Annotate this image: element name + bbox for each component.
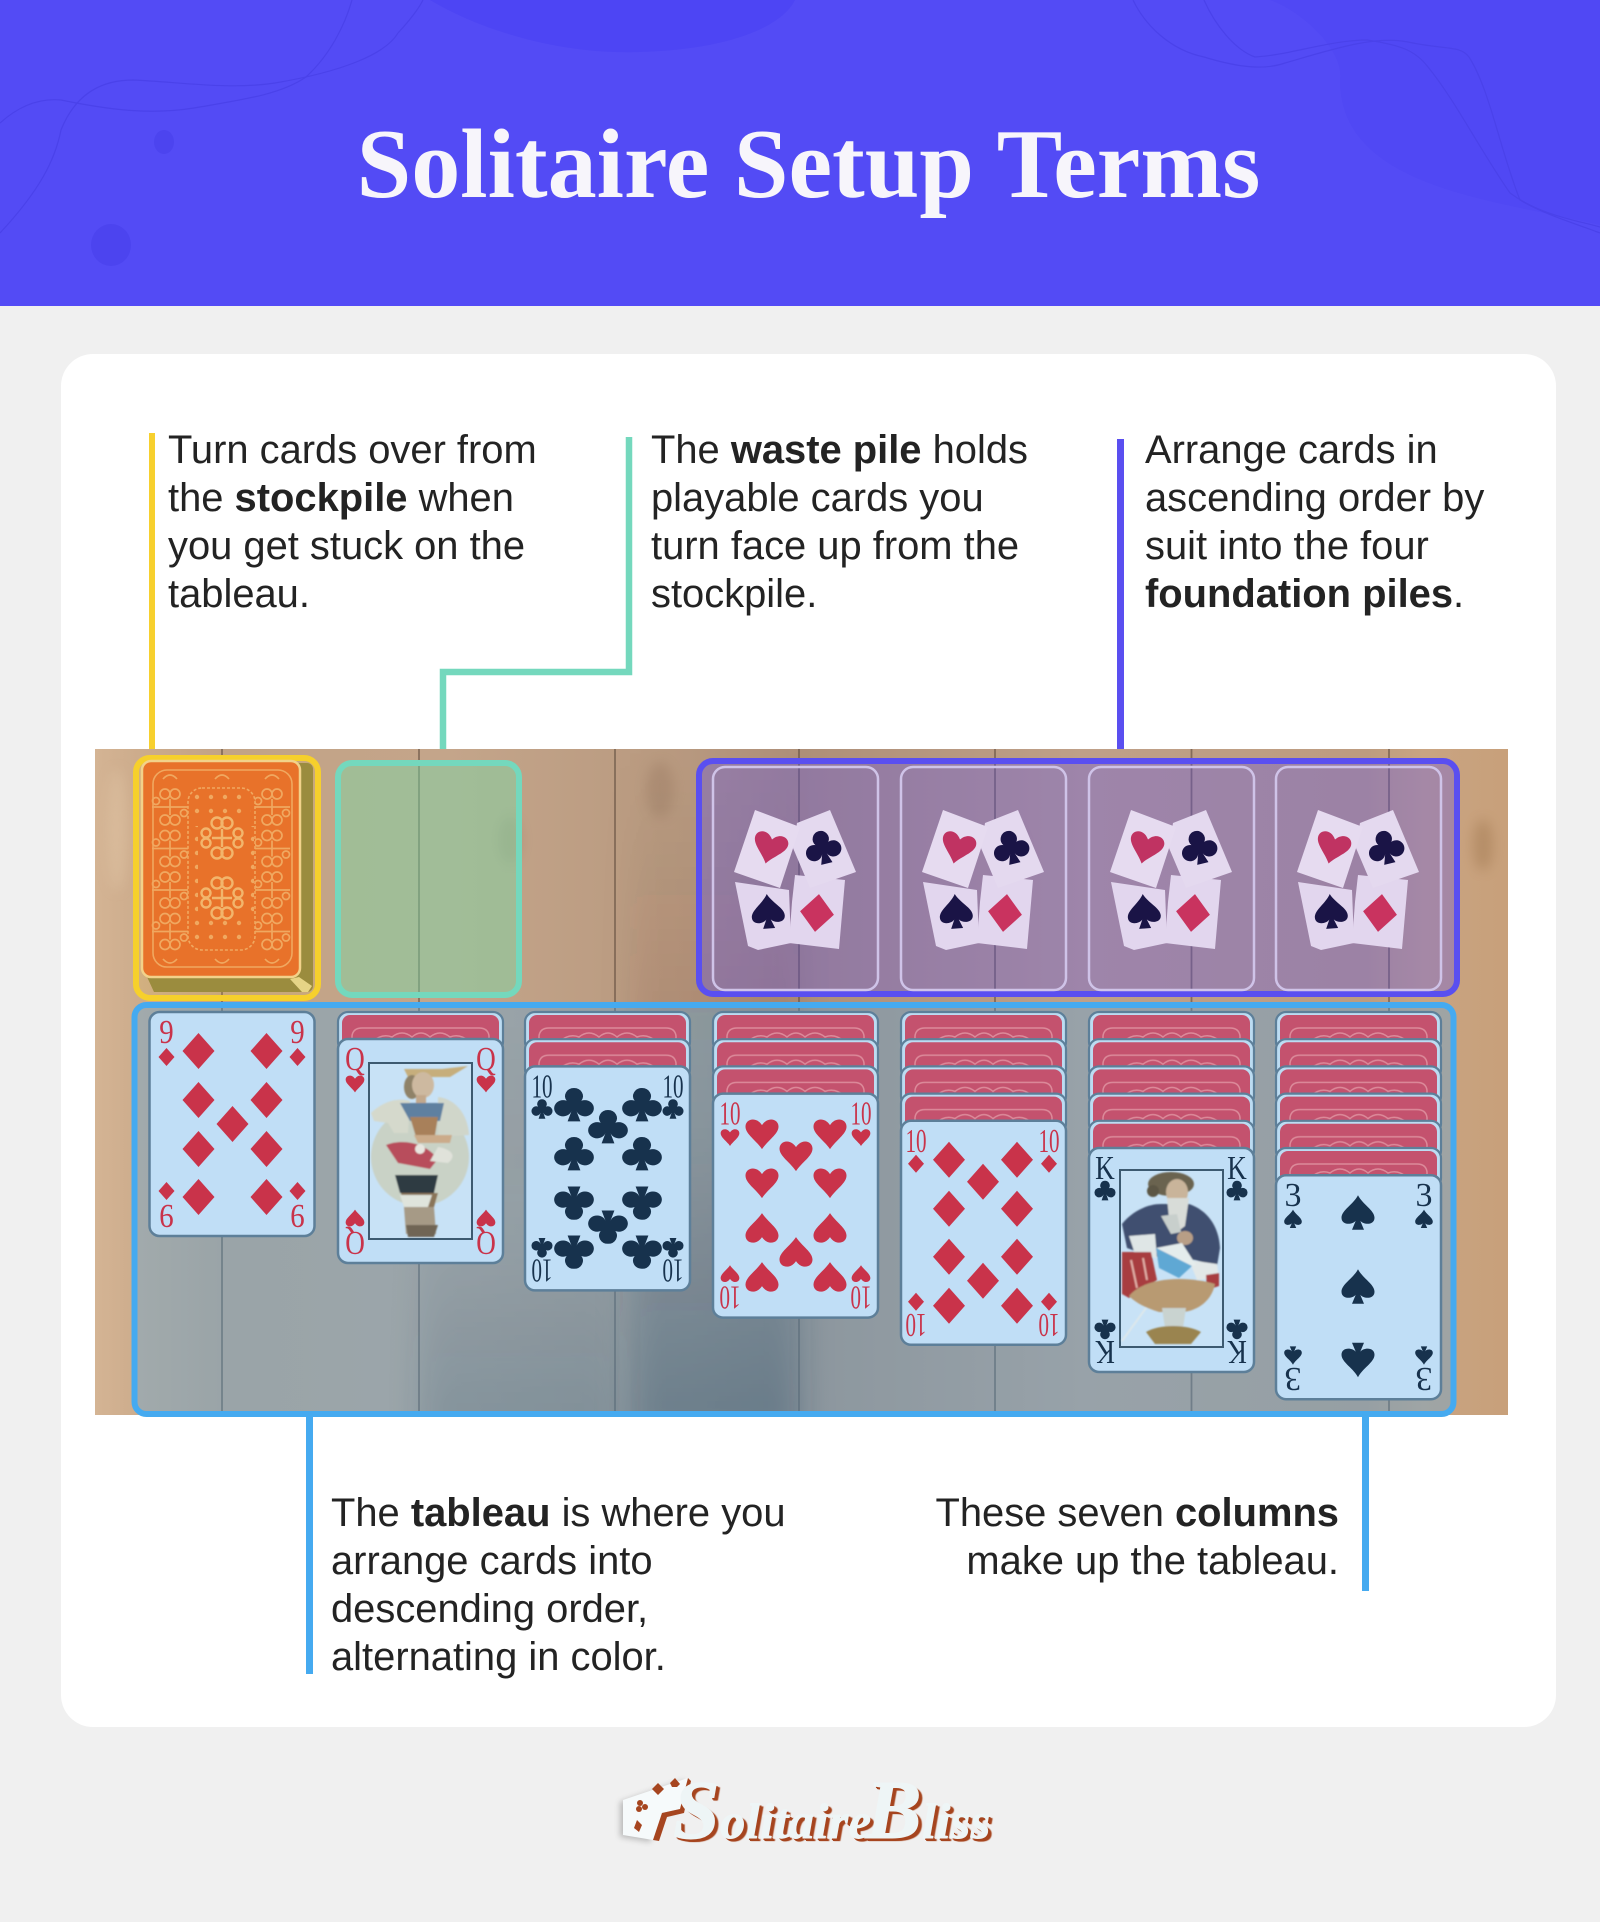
ten of clubs card [525, 1066, 690, 1290]
ten of diamonds card: 10 [905, 1305, 927, 1343]
text: tableau: descending order, [331, 1587, 648, 1631]
ten of hearts card: 10 [719, 1096, 741, 1133]
column 1: nine of diamonds: 9 [290, 1197, 305, 1235]
king portrait [1122, 1172, 1220, 1344]
solitaire board illustration [95, 749, 1508, 1417]
text: stockpile: you get stuck on the [168, 524, 525, 568]
white panel [61, 354, 1556, 1727]
king card: K [1227, 1149, 1247, 1187]
column 1: nine of diamonds: 9 [159, 1013, 174, 1051]
three of spades card [1276, 1175, 1441, 1399]
column 1: nine of diamonds: 9 [159, 1197, 174, 1235]
text: foundation piles: foundation piles. [1145, 572, 1464, 616]
panel: stockpile highlight [136, 758, 318, 998]
text: waste pile: stockpile. [651, 572, 817, 616]
face-down cards [713, 1012, 878, 1106]
header banner [0, 0, 1600, 306]
text: stockpile: the stockpile when [168, 476, 514, 520]
ten of diamonds card: 10 [905, 1123, 927, 1160]
foundation slot 1 [713, 767, 878, 990]
ten of clubs card: 10 [531, 1069, 553, 1106]
column 7: three of spades [1276, 1012, 1441, 1399]
title: Solitaire Setup Terms [357, 110, 1260, 219]
queen card: Q [476, 1040, 496, 1078]
ten of hearts card: 10 [719, 1278, 741, 1315]
connector: tableau [306, 1414, 312, 1674]
foundation slot 2 [901, 767, 1066, 990]
face-down cards [338, 1012, 503, 1052]
king card [1089, 1148, 1254, 1372]
text: foundation piles: Arrange cards in [1145, 428, 1438, 472]
icon: stock card back [142, 761, 313, 992]
panel: foundation highlight [699, 761, 1457, 994]
queen card: Q [345, 1224, 365, 1262]
queen card: Q [345, 1040, 365, 1078]
panel: waste pile highlight [338, 763, 519, 995]
column 1: nine of diamonds: 9 [290, 1013, 305, 1051]
ten of clubs card: 10 [662, 1251, 684, 1288]
text: waste pile: playable cards you [651, 476, 984, 520]
text: columns [935, 1491, 1339, 1583]
text: tableau: The tableau is where you [331, 1491, 786, 1535]
column 3: ten of clubs [525, 1012, 690, 1290]
connector: stockpile [148, 433, 155, 758]
text: foundation piles: suit into the four [1145, 524, 1429, 568]
connector: columns [1362, 1414, 1368, 1591]
text: waste pile [651, 428, 1028, 616]
ten of diamonds card: 10 [1038, 1305, 1060, 1343]
connector: waste pile [440, 437, 632, 749]
text: stockpile: Turn cards over from [168, 428, 537, 472]
text: tableau: alternating in color. [331, 1635, 666, 1679]
foundation slot 3 [1089, 767, 1254, 990]
face-down cards [1089, 1012, 1254, 1161]
three of spades card: 3 [1416, 1177, 1432, 1214]
column 2: queen of hearts [338, 1012, 503, 1263]
text: columns: These seven columns [935, 1491, 1339, 1535]
face-down cards [525, 1012, 690, 1079]
king card: K [1095, 1149, 1115, 1187]
wood table [95, 749, 1508, 1440]
text: foundation piles: ascending order by [1145, 476, 1484, 520]
text: columns: make up the tableau. [966, 1539, 1339, 1583]
queen portrait [371, 1066, 469, 1237]
three of spades card: 3 [1416, 1360, 1432, 1397]
ten of hearts card: 10 [850, 1096, 872, 1133]
ten of diamonds card: 10 [1038, 1123, 1060, 1160]
column 6: king of clubs [1089, 1012, 1254, 1372]
ten of clubs card: 10 [662, 1069, 684, 1106]
king card: K [1095, 1333, 1115, 1371]
three of spades card: 3 [1284, 1360, 1302, 1397]
queen card [338, 1039, 503, 1263]
three of spades card: 3 [1284, 1177, 1302, 1214]
column 5: ten of diamonds [901, 1012, 1066, 1345]
column 4: ten of hearts [713, 1012, 878, 1318]
text: foundation piles [1145, 428, 1484, 616]
text: tableau [331, 1491, 786, 1679]
ten of hearts card [713, 1094, 878, 1318]
logo wordmark: SolitaireBliss [673, 1764, 991, 1857]
text: stockpile: tableau. [168, 572, 310, 616]
face-down cards [901, 1012, 1066, 1134]
face-down cards [1276, 1012, 1441, 1188]
text: waste pile: The waste pile holds [651, 428, 1028, 472]
queen card: Q [476, 1224, 496, 1262]
ten of clubs card: 10 [531, 1251, 553, 1288]
text: waste pile: turn face up from the [651, 524, 1019, 568]
connector: foundation piles [1117, 439, 1124, 761]
column 1: nine of diamonds [150, 1012, 314, 1236]
text: tableau: arrange cards into [331, 1539, 653, 1583]
king card: K [1227, 1333, 1247, 1371]
ten of diamonds card [901, 1121, 1066, 1345]
logo: Solitaire Bliss [617, 1764, 994, 1857]
panel: tableau highlight [134, 1005, 1454, 1414]
foundation slot 4 [1276, 767, 1441, 990]
text: stockpile [168, 428, 537, 616]
ten of hearts card: 10 [850, 1278, 872, 1315]
icon: card fan [617, 1778, 691, 1844]
